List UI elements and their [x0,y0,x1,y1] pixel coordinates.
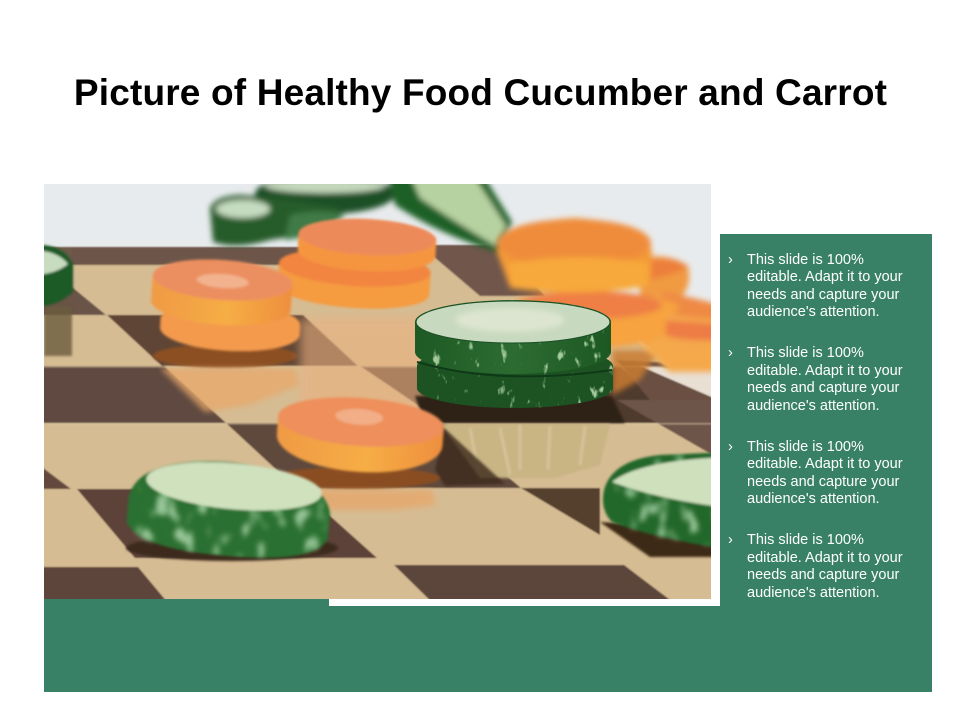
cucumber stack, centre [415,300,613,408]
photo: carrot and cucumber slices on a chessboard [44,184,711,599]
bullet 1: needs and capture your [747,286,899,302]
bullet 3: This slide is 100% [747,438,864,454]
bullet 1: editable. Adapt it to your [747,269,903,285]
bullet 2 [728,345,903,414]
bullet 4 [728,532,903,600]
background wall [44,184,711,416]
bullet 3: needs and capture your [747,474,899,490]
back cucumbers [210,170,512,252]
cucumber, bottom left foreground [124,453,334,565]
bullet 4: › [728,532,733,548]
left edge cucumber [30,245,73,306]
upper cucumber slice [415,300,611,374]
title: Picture of Healthy Food Cucumber and Carrot [74,72,887,113]
carrot stack, middle back [276,215,437,313]
bullet 4: needs and capture your [747,567,899,583]
bullet 2: editable. Adapt it to your [747,362,903,378]
bullet 2: This slide is 100% [747,345,864,361]
chessboard [30,245,730,615]
bullet 3 [728,438,903,507]
bullet 1: This slide is 100% [747,252,864,268]
bullet 4: This slide is 100% [747,532,864,548]
cucumber, right foreground [603,452,730,550]
bullet 4: editable. Adapt it to your [747,550,903,566]
carrot, centre foreground [275,392,445,478]
lower cucumber slice [417,346,613,408]
bullet 2: › [728,345,733,361]
bullet 2: needs and capture your [747,380,899,396]
bullet 4: audience's attention. [747,584,880,600]
bullet 3: editable. Adapt it to your [747,456,903,472]
reflections on board [44,306,730,561]
bullet 2: audience's attention. [747,398,880,414]
bullet 1: audience's attention. [747,304,880,320]
background carrots, right [496,218,730,372]
bullet 1: › [728,252,733,268]
bullet 1 [728,252,903,320]
carrot stack, left [150,255,301,355]
bullet 3: › [728,438,733,454]
panel: green backing shape [44,234,932,692]
bullet 3: audience's attention. [747,491,880,507]
